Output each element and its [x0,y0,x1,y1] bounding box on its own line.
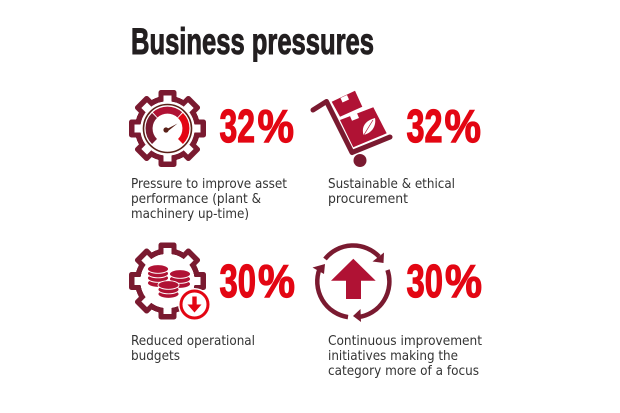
description: Continuous improvement [328,334,482,349]
description: category more of a focus [328,364,479,379]
percentage [406,255,482,307]
description: machinery up-time) [131,207,249,222]
percentage: % [258,255,295,307]
description: budgets [131,349,180,364]
icon: gear with gauge [117,78,218,179]
icon: gear with coins and down arrow [117,231,218,331]
percentage: 32 [406,100,442,152]
percentage: % [444,100,481,152]
description: Sustainable & ethical [328,177,455,192]
icon: hand truck with boxes [313,91,390,167]
title: Business pressures [131,21,374,62]
description: performance (plant & [131,192,261,207]
percentage: 30 [406,255,443,307]
panel: continuous improvement [312,246,482,379]
description: initiatives making the [328,349,458,364]
panel: asset performance [117,78,294,222]
percentage [220,100,294,152]
percentage [406,100,481,152]
icon: circular arrows with up arrow [312,246,389,322]
panel: budgets [117,231,295,364]
percentage: 30 [220,255,256,307]
description: Pressure to improve asset [131,177,287,192]
percentage: % [258,100,294,152]
panel: procurement [313,91,481,207]
description: Reduced operational [131,334,255,349]
percentage: 32 [220,100,255,152]
description: procurement [328,192,408,207]
percentage [220,255,295,307]
percentage: % [445,255,482,307]
